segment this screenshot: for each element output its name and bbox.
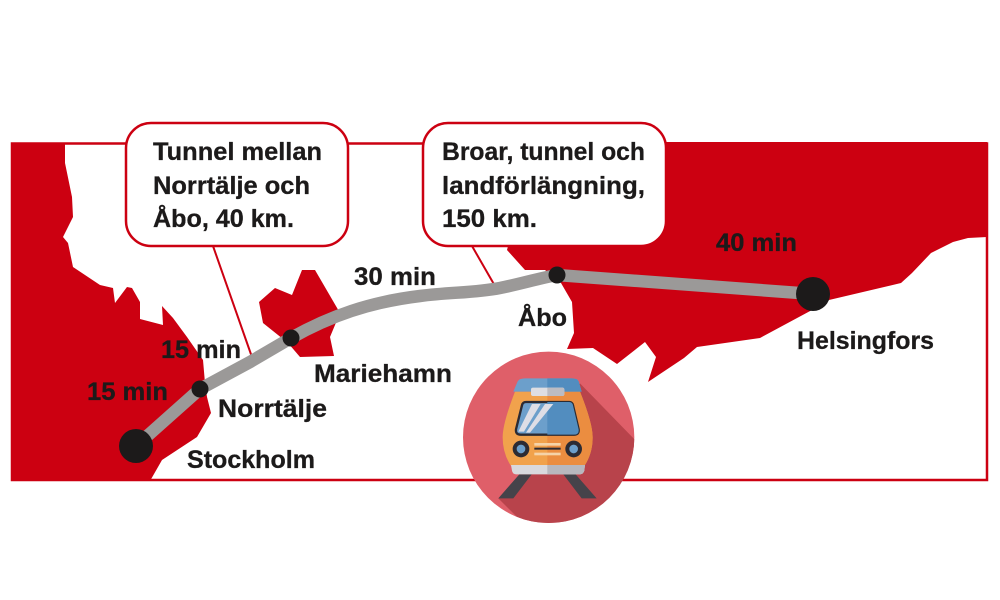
city label: Stockholm: Stockholm bbox=[187, 446, 315, 474]
land: Finland bbox=[507, 142, 987, 382]
callout: tunnel bbox=[126, 123, 348, 246]
callout: bridges: landförlängning, bbox=[442, 172, 645, 200]
station: Stockholm bbox=[119, 429, 153, 463]
callout: tunnel: Tunnel mellan bbox=[153, 138, 322, 166]
station: Åbo bbox=[548, 266, 566, 284]
callout: tunnel: Åbo, 40 km. bbox=[153, 204, 294, 233]
map infographic bbox=[10, 122, 988, 523]
city label: Helsingfors: Helsingfors bbox=[797, 327, 934, 355]
time label: 30 min: 30 min bbox=[354, 263, 436, 291]
map frame bbox=[12, 144, 987, 480]
city label: Mariehamn: Mariehamn bbox=[314, 360, 452, 388]
leader line: bridges bbox=[472, 246, 499, 293]
land: Sweden bbox=[12, 143, 211, 481]
station: Norrtälje bbox=[192, 380, 208, 398]
city label: Norrtälje: Norrtälje bbox=[218, 395, 327, 423]
time label: 15 min Norrtälje–Mariehamn: 15 min bbox=[161, 336, 241, 364]
time label: 15 min Stockholm–Norrtälje: 15 min bbox=[87, 378, 168, 406]
station: Mariehamn bbox=[282, 330, 300, 346]
callout: bridges: Broar, tunnel och bbox=[442, 138, 645, 166]
rail route bbox=[136, 275, 813, 446]
time label: 40 min: 40 min bbox=[716, 229, 797, 257]
icon: train bbox=[463, 352, 640, 530]
callout: bridges: 150 km. bbox=[442, 205, 537, 233]
station: Helsingfors bbox=[796, 277, 830, 311]
callout: bridges bbox=[423, 123, 666, 246]
leader line: tunnel bbox=[213, 246, 253, 360]
city label: Åbo: Åbo bbox=[518, 303, 567, 332]
land: Åland bbox=[259, 270, 340, 357]
callout: tunnel: Norrtälje och bbox=[153, 172, 310, 200]
